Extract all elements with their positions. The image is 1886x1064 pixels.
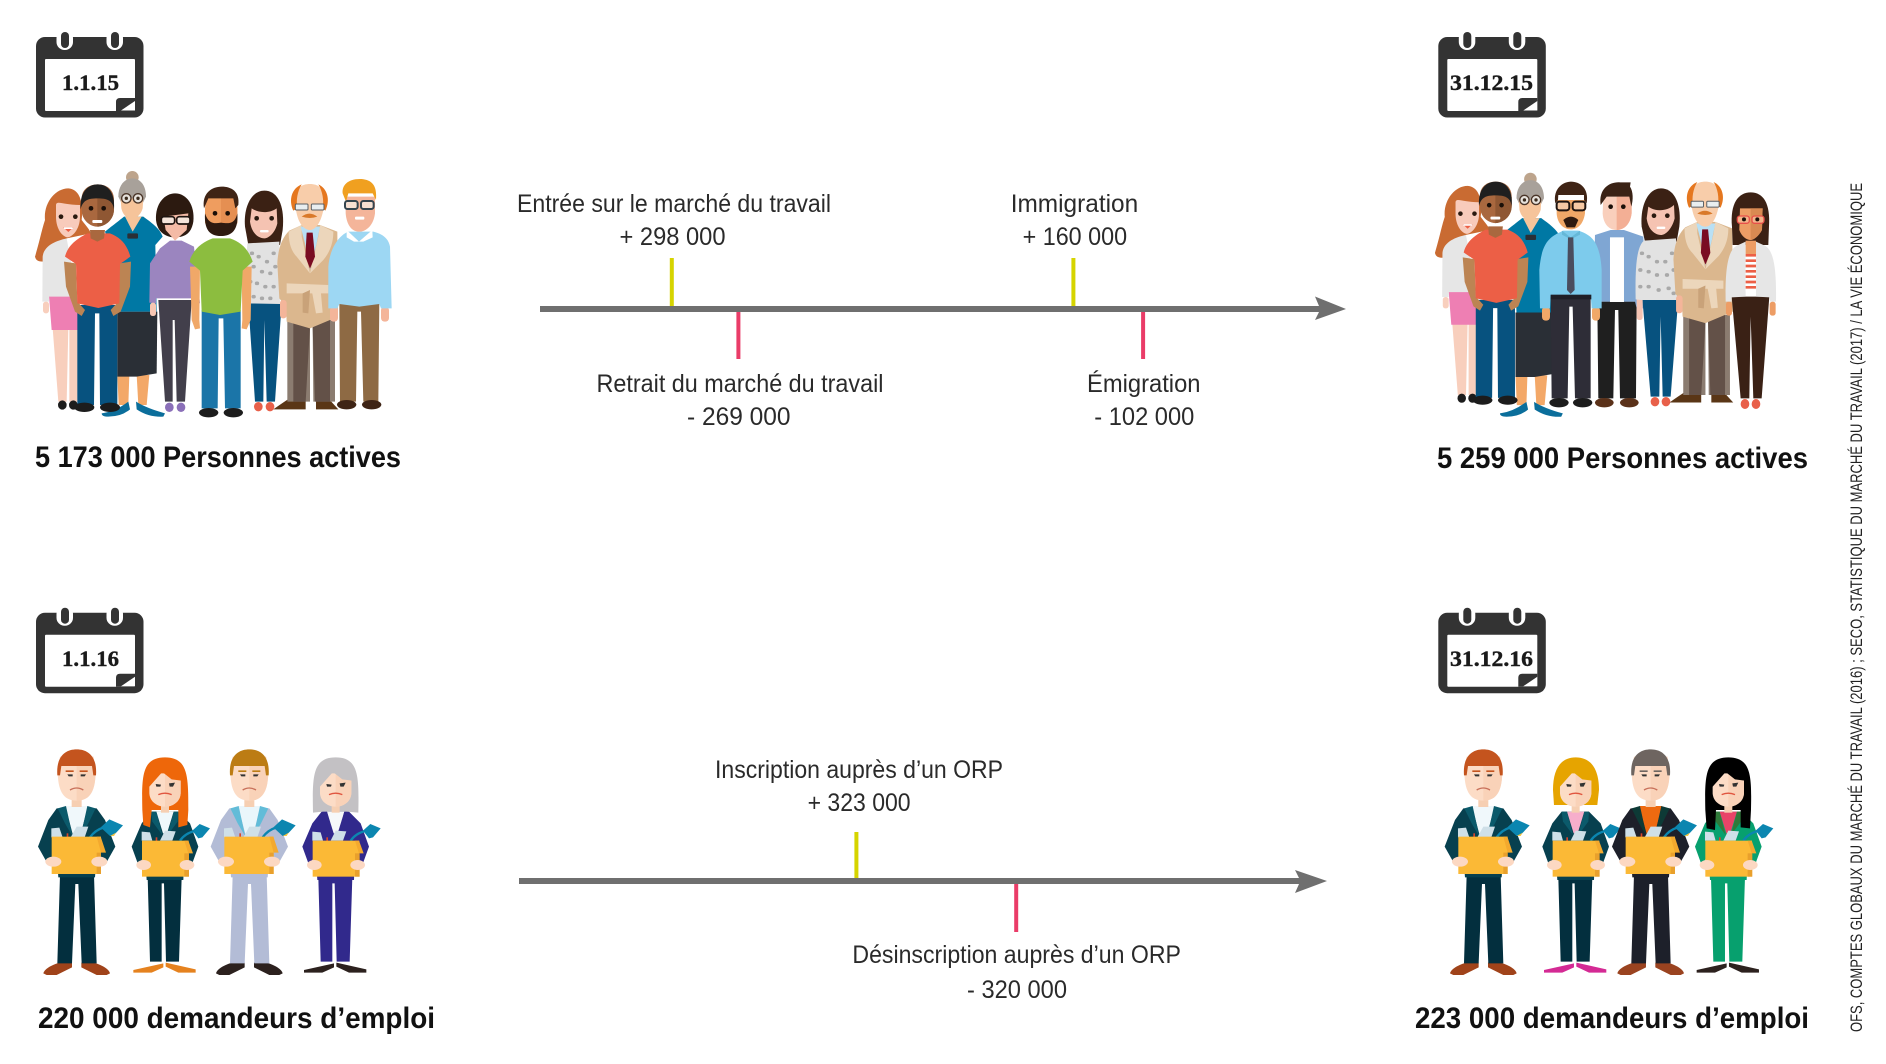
person: blond man in light blue sweater: [328, 179, 392, 409]
person: woman in purple shirt: [149, 193, 200, 412]
tick: retrait: [736, 311, 740, 359]
calendar: 31.12.16: [1438, 606, 1546, 693]
tick: entrée: [670, 258, 674, 306]
heading: 220 000 demandeurs d'emploi: 220 000 demandeurs d’emploi: [38, 1002, 435, 1035]
person: man with shirt and tie: [1539, 182, 1602, 407]
arrow: [540, 296, 1346, 320]
label: entrée sur le marché du travail: Entrée sur le marché du travail: [517, 190, 831, 218]
person: woman in white cardigan with red glasses: [1726, 192, 1776, 409]
person: woman in long-sleeve polka-dot blouse: [1636, 188, 1680, 406]
person: woman with black hair: [1695, 757, 1773, 973]
person: woman with long orange hair: [132, 757, 210, 973]
heading: 5 173 000 Personnes actives: 5 173 000 Personnes actives: [35, 441, 401, 474]
value: -320 000: - 320 000: [967, 976, 1067, 1004]
label: inscription auprès d'un ORP: Inscription auprès d’un ORP: [715, 756, 1003, 784]
calendar: 1.1.15: [36, 30, 144, 118]
person: man in blazer: [1593, 182, 1647, 407]
timeline 2015: [540, 258, 1346, 359]
heading: 5 259 000 Personnes actives: 5 259 000 Personnes actives: [1437, 442, 1808, 475]
calendar: 1.1.15: 1.1.15: [62, 70, 119, 95]
timeline 2016: [519, 832, 1327, 932]
label: immigration: Immigration: [1011, 190, 1138, 218]
person: woman in polka-dot blouse: [243, 191, 283, 411]
calendar: 31.12.15: [1438, 30, 1546, 118]
value: -102 000: - 102 000: [1094, 403, 1194, 431]
calendar: 1.1.16: [36, 606, 144, 693]
value: +323 000: + 323 000: [808, 789, 911, 817]
heading: 223 000 demandeurs d'emploi: 223 000 demandeurs d’emploi: [1415, 1002, 1809, 1035]
calendar: 31.12.15: 31.12.15: [1450, 70, 1533, 95]
illustration: group of working people, start of 2015: [35, 171, 392, 417]
person: woman with grey hair: [302, 757, 381, 973]
person: bearded man in green t-shirt: [189, 187, 253, 417]
value: +160 000: + 160 000: [1023, 223, 1127, 251]
tick: émigration: [1141, 311, 1145, 359]
label: retrait du marché du travail: Retrait du marché du travail: [596, 370, 884, 398]
value: -269 000: - 269 000: [687, 403, 790, 431]
label: émigration: Émigration: [1087, 369, 1200, 398]
value: +298 000: + 298 000: [620, 223, 726, 251]
calendar: 31.12.16: 31.12.16: [1450, 646, 1533, 671]
illustration: group of working people, end of 2015: [1435, 173, 1776, 417]
tick: désinscription: [1014, 884, 1018, 932]
label: désinscription auprès d'un ORP: Désinscription auprès d’un ORP: [852, 941, 1181, 969]
tick: immigration: [1071, 258, 1075, 306]
illustration: job seekers, start of 2016: [38, 749, 381, 975]
calendar: 1.1.16: 1.1.16: [62, 646, 119, 671]
arrow: [519, 870, 1327, 893]
person: woman with blond hair: [1542, 757, 1621, 973]
tick: inscription: [854, 832, 858, 878]
illustration: job seekers, end of 2016: [1445, 749, 1773, 975]
